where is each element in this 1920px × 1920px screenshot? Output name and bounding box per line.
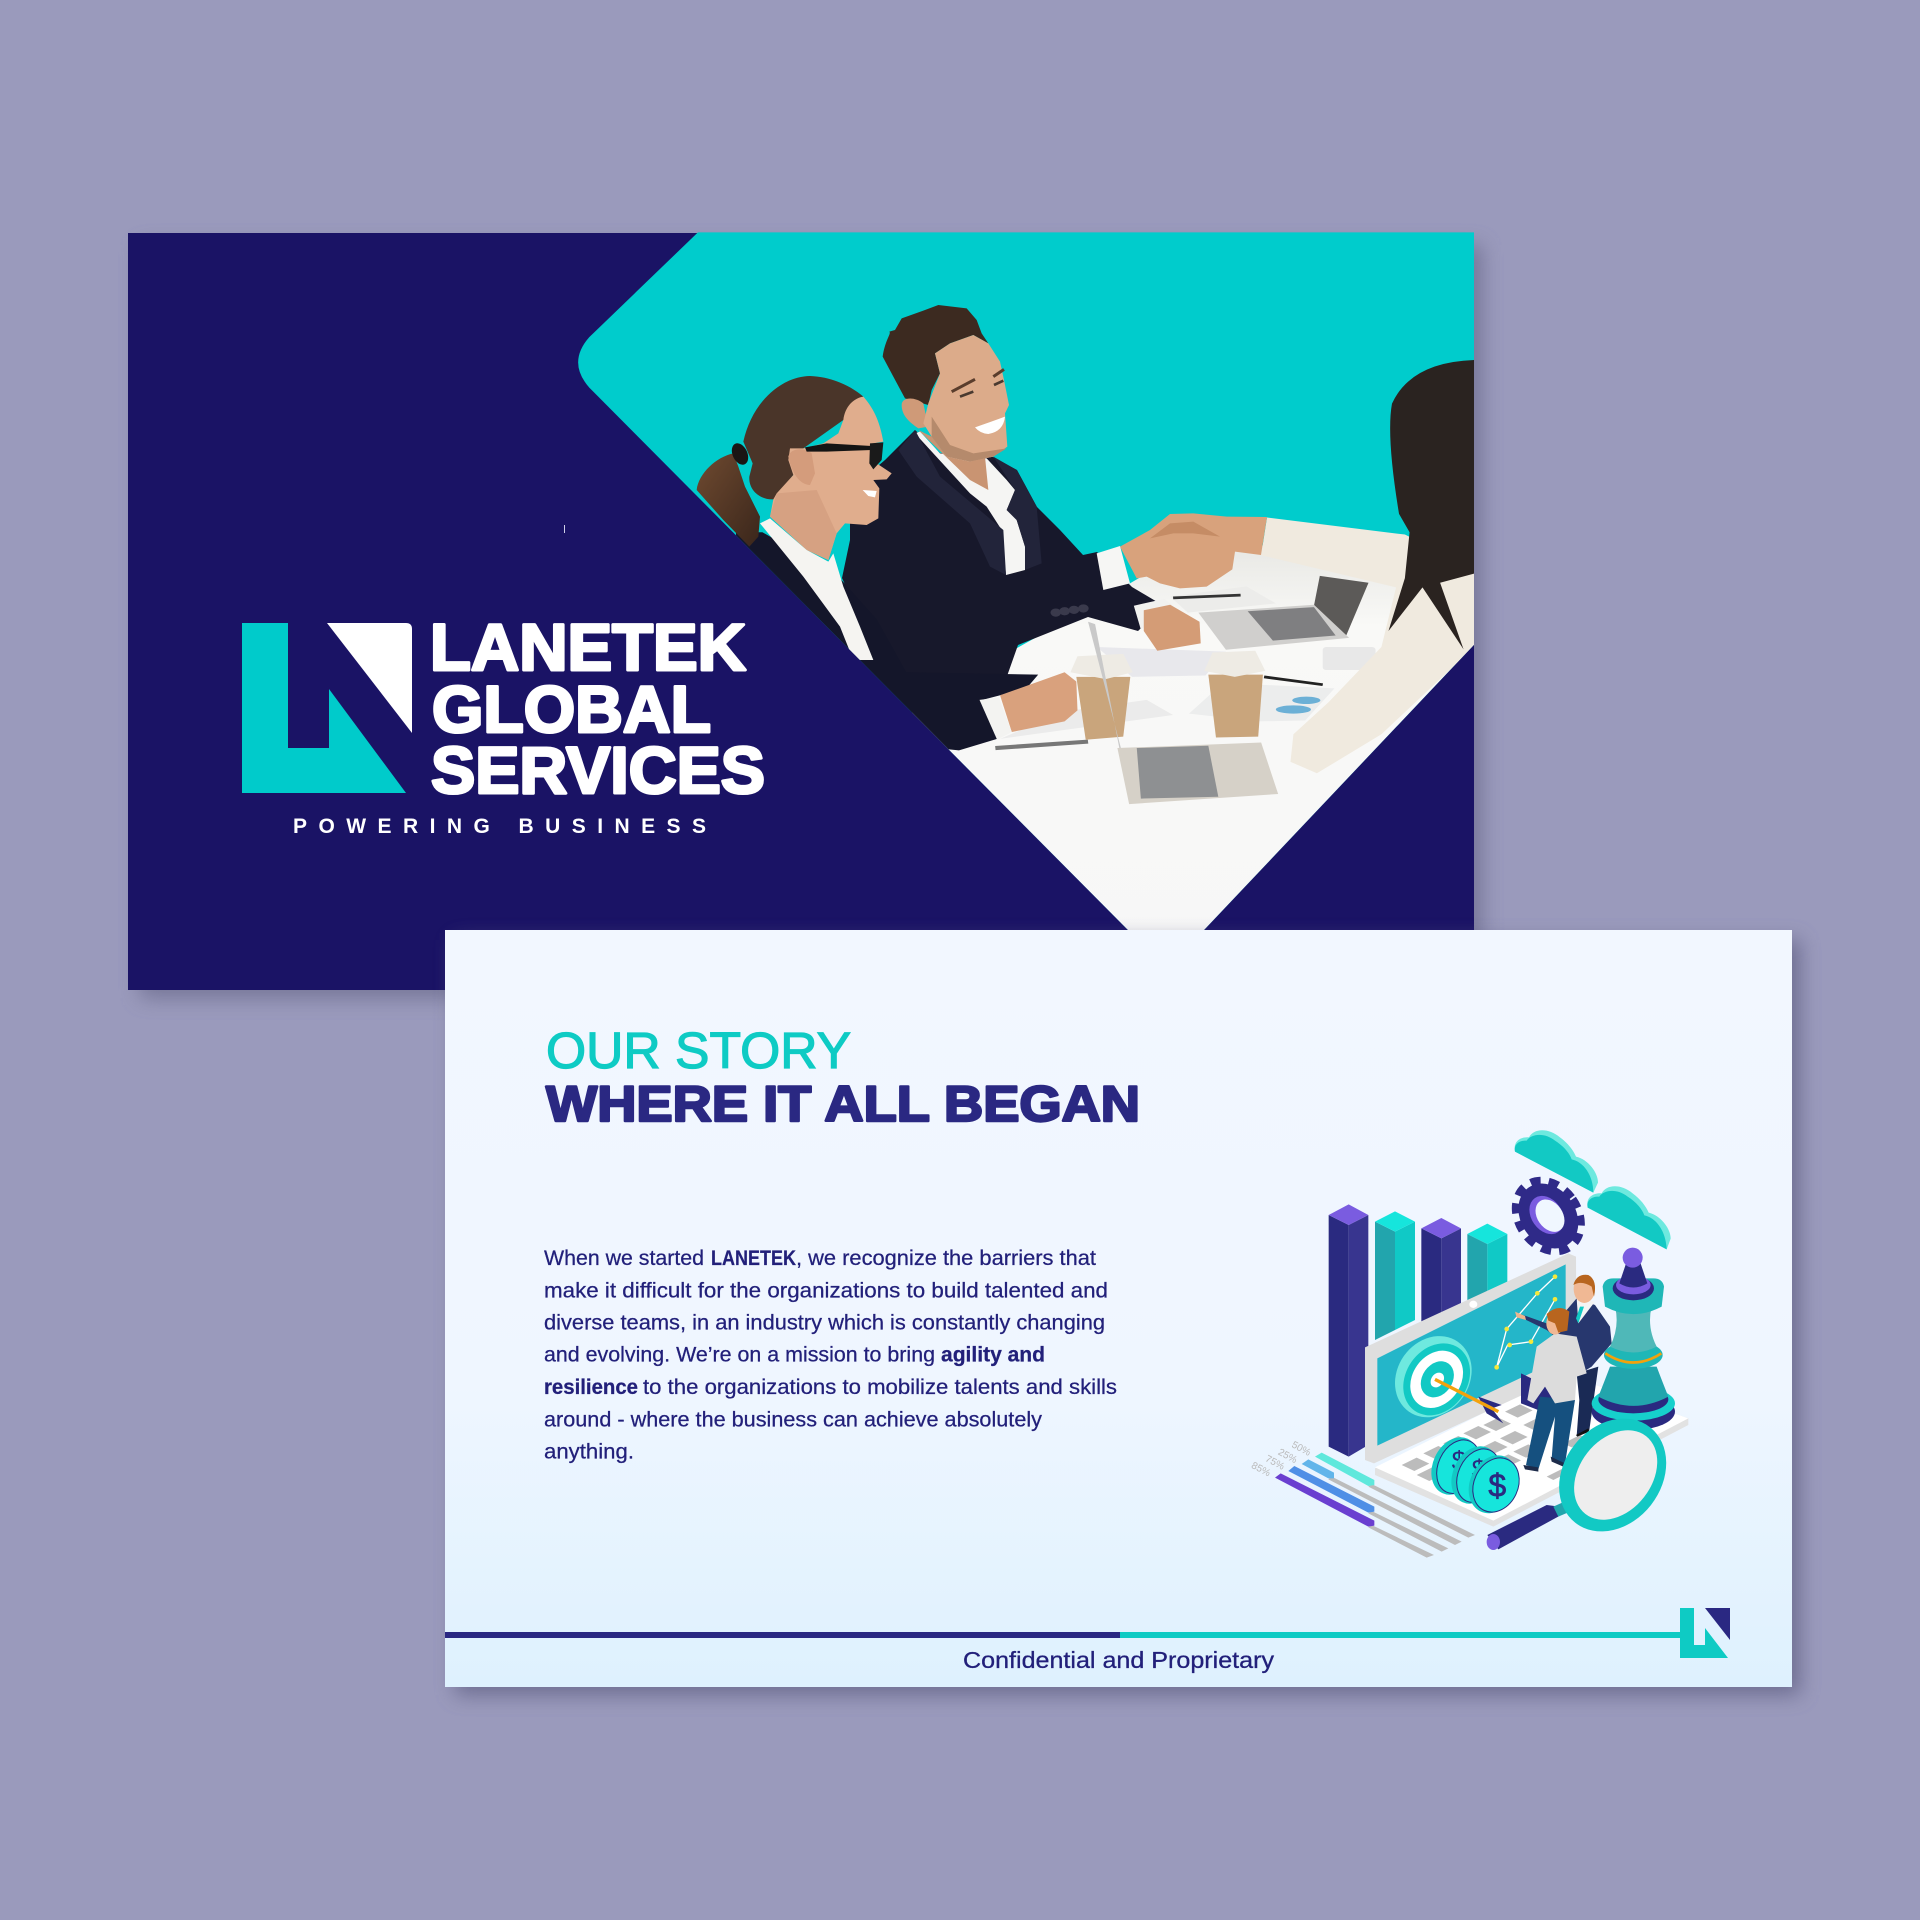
body text: LANETEK [711,1247,796,1270]
body text: When we started [544,1247,704,1270]
body text: , we recognize the barriers that [796,1247,1096,1270]
progress bar labels: 25% [1276,1447,1299,1466]
progress bars [1275,1453,1475,1558]
man in navy suit [1515,1275,1612,1437]
logo: wordmark [430,610,765,807]
progress bar labels: 50% [1290,1440,1313,1459]
bar 1 [1329,1204,1368,1457]
body text: agility and [941,1344,1045,1367]
progress bar labels: 85% [1249,1460,1272,1479]
bar 4 [1467,1224,1507,1303]
logo: wordmark: SERVICES [431,733,765,807]
clouds [1515,1130,1671,1249]
body text: diverse teams, in an industry which is constantly changing [544,1312,1105,1334]
body text: around - where the business can achieve absolutely [544,1408,1042,1431]
body text: to the organizations to mobilize talents and skills [643,1376,1117,1399]
body text: and evolving. We’re on a mission to bring [544,1344,935,1367]
logo: wordmark: LANETEK [430,610,746,684]
man head and hand [883,305,1267,590]
laptop screen [1365,1253,1577,1463]
progress bar labels: 75% [1263,1454,1286,1473]
woman head and shirt [697,376,892,660]
coins: $ [1452,1446,1467,1476]
logo: LN mark [242,623,412,793]
laptop base [1375,1373,1688,1527]
progress bar labels [1249,1440,1313,1479]
panel: our story slide [445,930,1800,1695]
illustration: isometric business strategy [1249,1130,1688,1558]
table and far woman [912,360,1474,940]
arrow [1435,1379,1503,1423]
body text: make it difficult for the organizations to build talented and [544,1279,1108,1302]
coins: $ [1472,1454,1487,1484]
body text: resilience [544,1376,638,1399]
logo: wordmark: GLOBAL [432,672,711,746]
photo: business handshake meeting [560,230,1480,940]
tagline: POWERING BUSINESS [293,815,706,838]
target [1379,1321,1487,1432]
footer logo [1680,1608,1730,1658]
footer rule [445,1632,1680,1638]
cups and front laptop [1070,622,1278,804]
body text: anything. [544,1440,634,1464]
dollar sign: $ [1488,1468,1506,1504]
chess king [1592,1248,1675,1430]
bar 2 [1375,1211,1415,1340]
gear [1503,1169,1594,1263]
magnifying glass [1487,1397,1688,1553]
coins [1422,1430,1528,1521]
footer text: Confidential and Proprietary [963,1647,1275,1673]
line chart [1494,1274,1557,1370]
heading: our story: OUR STORY [546,1022,851,1079]
bar 3 [1421,1218,1461,1327]
man suit [842,430,1164,679]
heading: where it all began: WHERE IT ALL BEGAN [546,1076,1140,1132]
man in grey jacket [1521,1308,1587,1472]
panel: cover slide [128,230,1482,998]
woman jacket and hands [736,532,1201,750]
